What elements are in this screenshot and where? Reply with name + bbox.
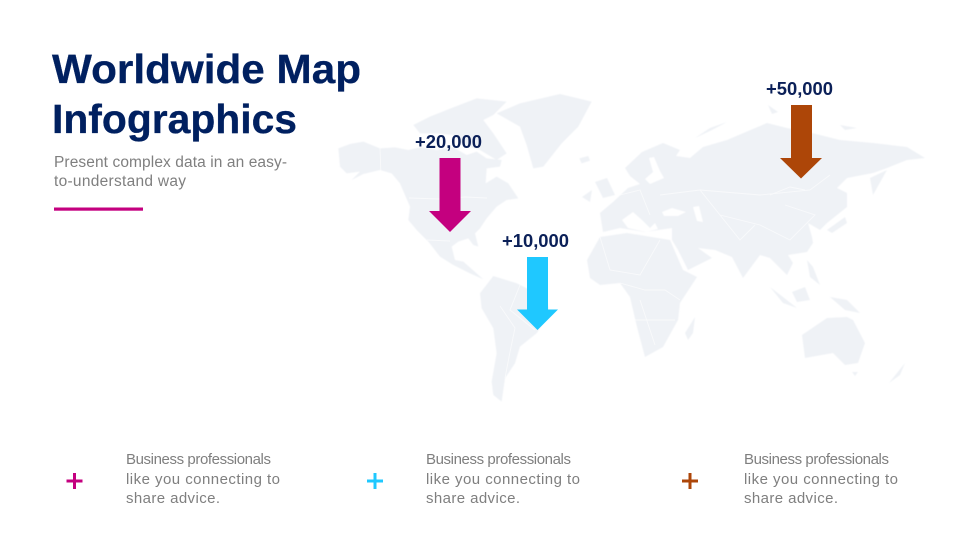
map: inland seas [622,157,703,232]
accent underline [54,208,143,211]
note 2 text: share advice. [426,490,520,507]
subtitle: to-understand way [54,173,186,190]
note 2 text: Business professionals [426,451,571,468]
callout: +20,000: +20,000 [415,132,482,152]
icon: cyan plus [367,473,383,489]
map: Americas and Greenland [338,94,592,402]
note 3 text: like you connecting to [744,471,898,488]
map: islands and Australia [582,105,905,383]
note 3 text: Business professionals [744,451,889,468]
title [52,46,361,142]
callout: +20,000 [415,132,482,232]
map: country border lines [380,148,830,378]
note 1 text: share advice. [126,490,220,507]
world map [338,94,925,402]
icon: magenta plus [66,473,82,489]
arrow: brown [780,105,822,178]
map: Eurasia [600,123,925,278]
callout: +50,000 [766,79,833,178]
icon: brown plus [682,473,698,489]
note 2 text [426,451,580,507]
callout: +50,000: +50,000 [766,79,833,99]
note 1 text: like you connecting to [126,471,280,488]
arrow: cyan [517,257,558,330]
note 2 [367,451,580,507]
note 3 text: share advice. [744,490,838,507]
note 1 [66,451,280,507]
map: Africa [587,233,697,357]
note 3 text [744,451,898,507]
title: Worldwide Map [52,46,361,92]
note 1 text: Business professionals [126,451,271,468]
note 3 [682,451,898,507]
note 1 text [126,451,280,507]
arrow: magenta [429,158,471,232]
title: Infographics [52,96,297,142]
callout: +10,000: +10,000 [502,231,569,251]
note 2 text: like you connecting to [426,471,580,488]
subtitle [54,154,287,190]
callout: +10,000 [502,231,569,330]
subtitle: Present complex data in an easy- [54,154,287,171]
